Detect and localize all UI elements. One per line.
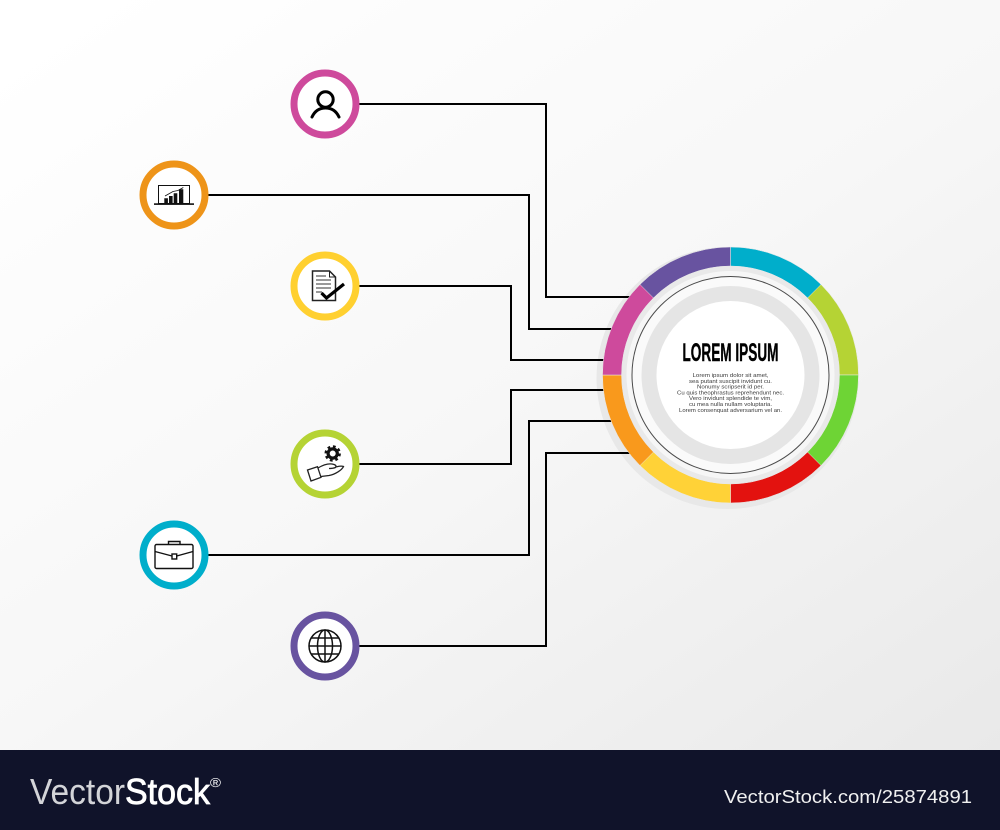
hub body text: sea putant suscipit invidunt cu. (689, 379, 772, 385)
central hub (602, 247, 858, 503)
icon: globe (309, 630, 341, 662)
thin inner ring (632, 276, 829, 474)
node: briefcase (143, 524, 205, 586)
footer logo: Stock (125, 771, 211, 812)
hub body text (677, 373, 784, 414)
node: hand with gear (294, 433, 356, 495)
footer bar (0, 750, 1000, 830)
icon: laptop chart (154, 186, 194, 205)
connector lines (207, 104, 645, 646)
icon: briefcase (155, 542, 193, 568)
hub body text: Nonumy scripserit id per. (697, 385, 764, 391)
footer logo: ® (210, 775, 221, 790)
footer logo (30, 771, 221, 812)
hub body text: Cu quis theophrastus reprehendunt nec. (677, 390, 784, 396)
icon: document with check (312, 271, 344, 300)
hub drop shadow (596, 247, 858, 509)
node: laptop chart (143, 164, 205, 226)
hub title: LOREM IPSUM (682, 339, 778, 367)
hub body text: Vero invidunt splendide te vim, (689, 396, 772, 402)
footer logo: Vector (30, 771, 125, 812)
hub body text: Lorem consenquat adversarium vel an. (679, 408, 782, 414)
node: globe (294, 615, 356, 677)
grey band (642, 286, 820, 464)
icon: hand with gear (308, 446, 344, 481)
hub body text: cu mea nulla nullam voluptaria. (689, 402, 772, 408)
white centre (656, 301, 804, 449)
hub inner backing (622, 266, 840, 484)
icon: person (312, 92, 339, 117)
segmented colour ring (602, 247, 858, 503)
hub body text: Lorem ipsum dolor sit amet, (692, 373, 769, 379)
footer image id: VectorStock.com/25874891 (724, 787, 972, 807)
node: person (294, 73, 356, 135)
node: document check (294, 255, 356, 317)
